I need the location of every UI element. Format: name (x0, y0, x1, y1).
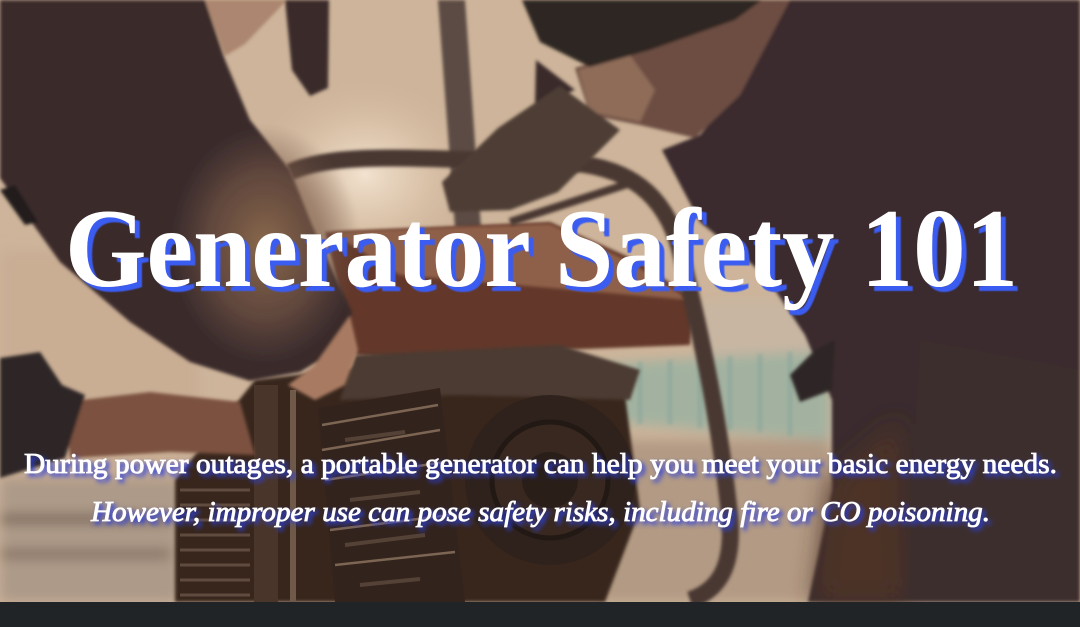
right worker (442, 0, 1080, 602)
bottom dark bar (0, 602, 1080, 627)
title: Generator Safety 101 (65, 187, 1018, 311)
sun glow (298, 111, 442, 230)
brick frame texture (180, 490, 250, 595)
fuel tank (325, 222, 695, 362)
pull starter housing (465, 395, 635, 565)
fence slats (637, 351, 793, 436)
left worker (0, 0, 360, 400)
generator frame tubes (290, 158, 730, 600)
background ground and fence (0, 344, 832, 602)
vertical pole (438, 0, 481, 228)
sleeve highlight (182, 130, 354, 350)
subtitle line 2: However, improper use can pose safety risks, including fire or CO poisoning. (90, 497, 990, 528)
engine parts under tank (340, 345, 640, 400)
engine vent panel (254, 385, 465, 602)
left hand and glove (0, 352, 255, 478)
generator body (175, 355, 640, 602)
subtitle line 1: During power outages, a portable generator can help you meet your basic energy needs. (24, 449, 1057, 480)
